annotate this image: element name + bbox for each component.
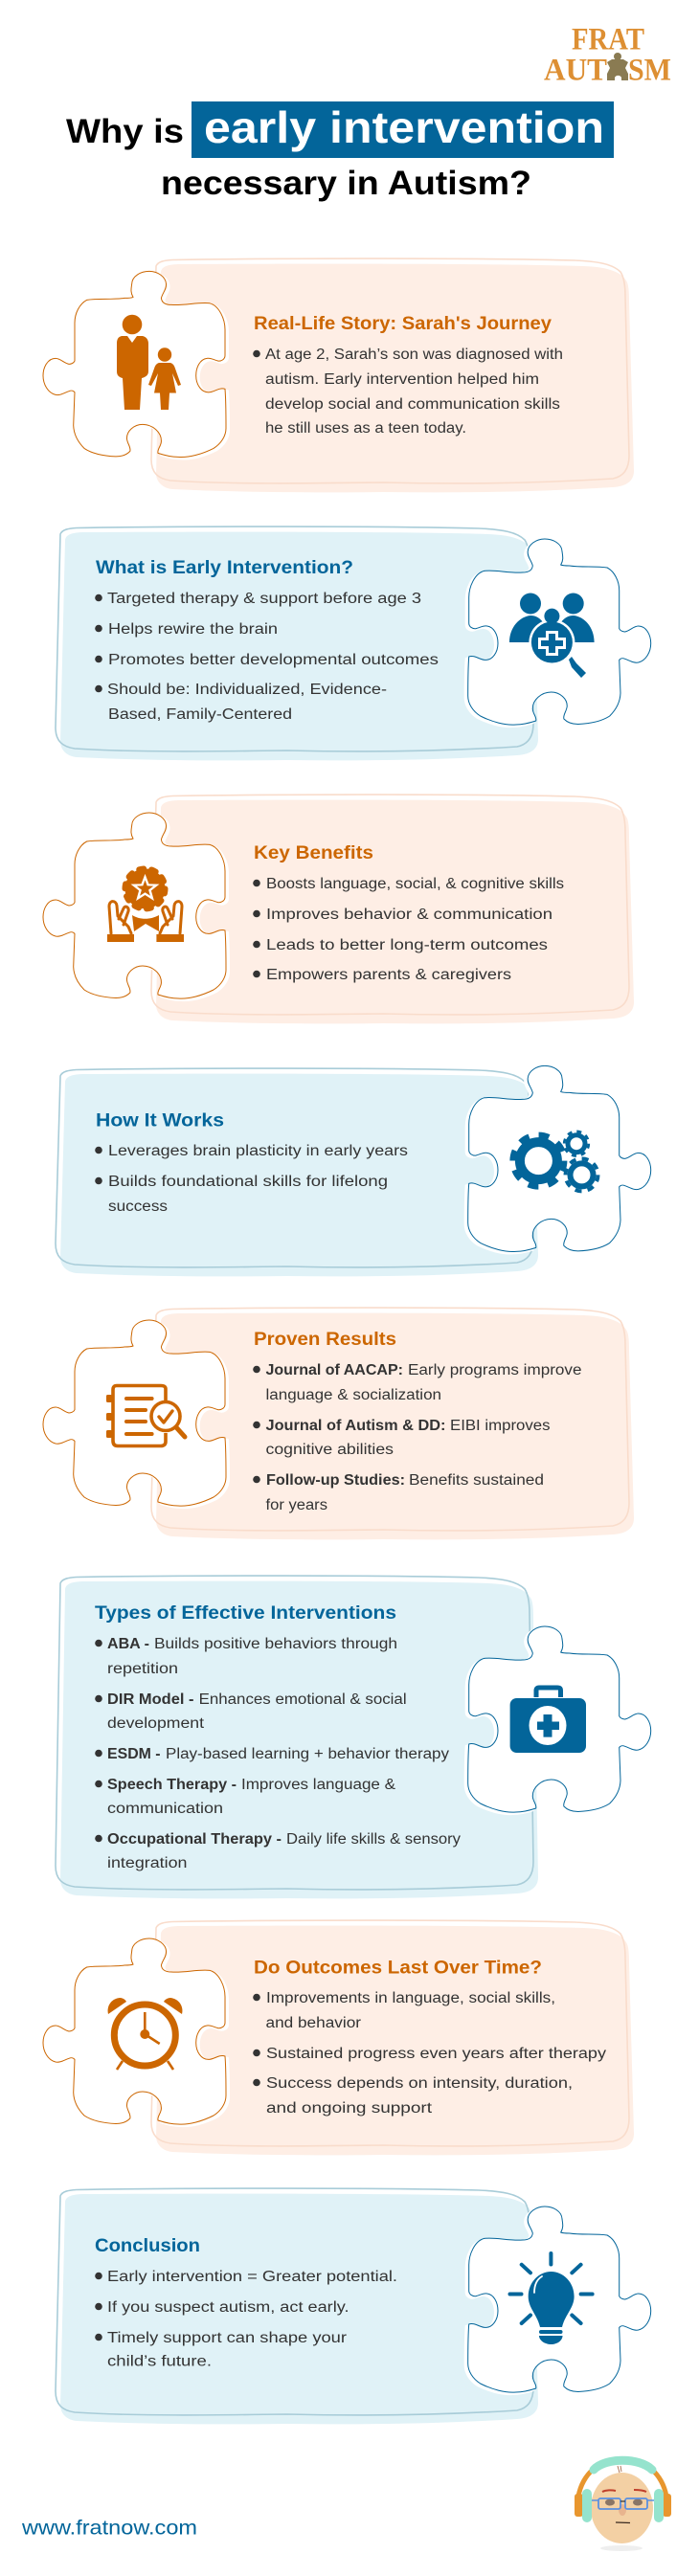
icon: award badge in hands [107, 868, 184, 942]
puzzle piece: award [43, 813, 229, 1000]
bullet list: Follow-up Studies: [266, 1472, 405, 1489]
bullet list: Sustained progress even years after therapy [266, 2046, 606, 2062]
heading: How It Works [96, 1110, 224, 1131]
bullet list: Helps rewire the brain [108, 621, 278, 638]
bullet list: EIBI improves [450, 1418, 551, 1434]
puzzle piece: family [43, 271, 229, 459]
panel: do outcomes last over time [43, 1920, 634, 2155]
bullet list: Targeted therapy & support before age 3 [107, 591, 421, 607]
bullet text: autism. Early intervention helped him [265, 371, 539, 388]
title: Why is [66, 113, 184, 150]
panel: how it works [56, 1065, 651, 1276]
footer website: www.fratnow.com [21, 2518, 197, 2539]
bullet list: success [108, 1198, 168, 1215]
title [66, 101, 614, 202]
heading: Real-Life Story: Sarah's Journey [254, 314, 552, 334]
logo: Frat Autism: SM [628, 54, 671, 88]
bullet list: Success depends on intensity, duration, [266, 2075, 573, 2092]
bullet text: he still uses as a teen today. [265, 420, 466, 437]
bullet list: Builds foundational skills for lifelong [108, 1174, 388, 1190]
bullet list: Occupational Therapy - [107, 1831, 282, 1848]
bullet list: ESDM - [107, 1746, 161, 1762]
puzzle piece: first aid kit [465, 1626, 651, 1814]
bullet list: DIR Model - [107, 1691, 193, 1708]
panel: key benefits [43, 795, 634, 1023]
bullet list: child’s future. [107, 2353, 212, 2370]
bullet list: Improves language & [241, 1777, 396, 1793]
heading: Do Outcomes Last Over Time? [254, 1959, 542, 1978]
panel: proven results [43, 1308, 634, 1539]
bullet list [253, 876, 564, 983]
bullet list: Leads to better long-term outcomes [266, 937, 548, 953]
puzzle piece: light bulb [465, 2206, 651, 2394]
puzzle piece: gears [465, 1065, 651, 1254]
bullet list: and behavior [266, 2015, 361, 2031]
bullet list: integration [107, 1855, 188, 1871]
logo: Frat Autism [544, 23, 671, 88]
bullet list: Daily life skills & sensory [286, 1831, 461, 1848]
bullet list: Improvements in language, social skills, [266, 1990, 555, 2006]
bullet text [253, 347, 563, 437]
puzzle piece: medical team [465, 539, 651, 727]
bullet list [253, 1362, 582, 1513]
bullet list: Empowers parents & caregivers [266, 967, 511, 983]
logo: Frat Autism: FRAT [572, 23, 644, 57]
title: early intervention [204, 102, 604, 152]
bullet list: language & socialization [266, 1387, 441, 1403]
bullet list: Play-based learning + behavior therapy [166, 1746, 449, 1762]
bullet list: Enhances emotional & social [199, 1691, 407, 1708]
bullet list [95, 2269, 397, 2370]
mascot: face with headphones [575, 2460, 671, 2551]
heading: Types of Effective Interventions [95, 1603, 396, 1624]
bullet text: develop social and communication skills [265, 396, 560, 413]
icon: alarm clock [108, 1998, 182, 2070]
bullet list: Boosts language, social, & cognitive skills [266, 876, 564, 892]
bullet list: Timely support can shape your [107, 2330, 347, 2346]
bullet list [253, 1990, 606, 2117]
panel: types of effective interventions [56, 1576, 651, 1898]
bullet list [95, 1143, 408, 1215]
bullet list [95, 591, 439, 723]
bullet list [95, 1636, 461, 1871]
bullet list: Should be: Individualized, Evidence- [107, 682, 387, 698]
panel: real-life story [43, 258, 634, 492]
bullet list: Leverages brain plasticity in early years [108, 1143, 408, 1159]
icon: medical team with magnifier [509, 594, 595, 678]
bullet list: Benefits sustained [409, 1472, 544, 1489]
icon: document with magnifier [106, 1386, 185, 1445]
panel: what is early intervention [56, 526, 651, 760]
bullet list: for years [266, 1497, 327, 1513]
bullet list: Journal of AACAP: [266, 1362, 403, 1378]
icon: gears [512, 1131, 598, 1191]
bullet list: Builds positive behaviors through [154, 1636, 397, 1652]
bullet list: Promotes better developmental outcomes [108, 652, 439, 668]
bullet list: ABA - [107, 1636, 149, 1652]
icon: light bulb [509, 2253, 593, 2344]
puzzle piece: alarm clock [43, 1938, 229, 2126]
bullet list: and ongoing support [266, 2100, 433, 2117]
bullet list: cognitive abilities [266, 1442, 394, 1458]
heading: Conclusion [95, 2236, 200, 2256]
icon: first aid kit [510, 1688, 586, 1753]
bullet list: communication [107, 1801, 223, 1817]
bullet list: Speech Therapy - [107, 1777, 237, 1793]
bullet list: repetition [107, 1661, 178, 1677]
puzzle piece: research document [43, 1320, 229, 1508]
bullet list: Journal of Autism & DD: [266, 1418, 446, 1434]
bullet list: Based, Family-Centered [108, 706, 292, 723]
heading: What is Early Intervention? [96, 558, 353, 578]
bullet list: Early programs improve [408, 1362, 582, 1378]
bullet list: Improves behavior & communication [266, 907, 552, 923]
bullet text: At age 2, Sarah’s son was diagnosed with [265, 347, 563, 363]
title: necessary in Autism? [161, 165, 531, 202]
bullet list: If you suspect autism, act early. [107, 2299, 349, 2316]
icon: parent and child [117, 315, 181, 410]
bullet list: Early intervention = Greater potential. [107, 2269, 397, 2285]
panel: conclusion [56, 2188, 651, 2424]
heading: Proven Results [254, 1330, 396, 1350]
heading: Key Benefits [254, 843, 373, 863]
bullet list: development [107, 1715, 205, 1732]
logo: Frat Autism: AUT [544, 54, 607, 88]
